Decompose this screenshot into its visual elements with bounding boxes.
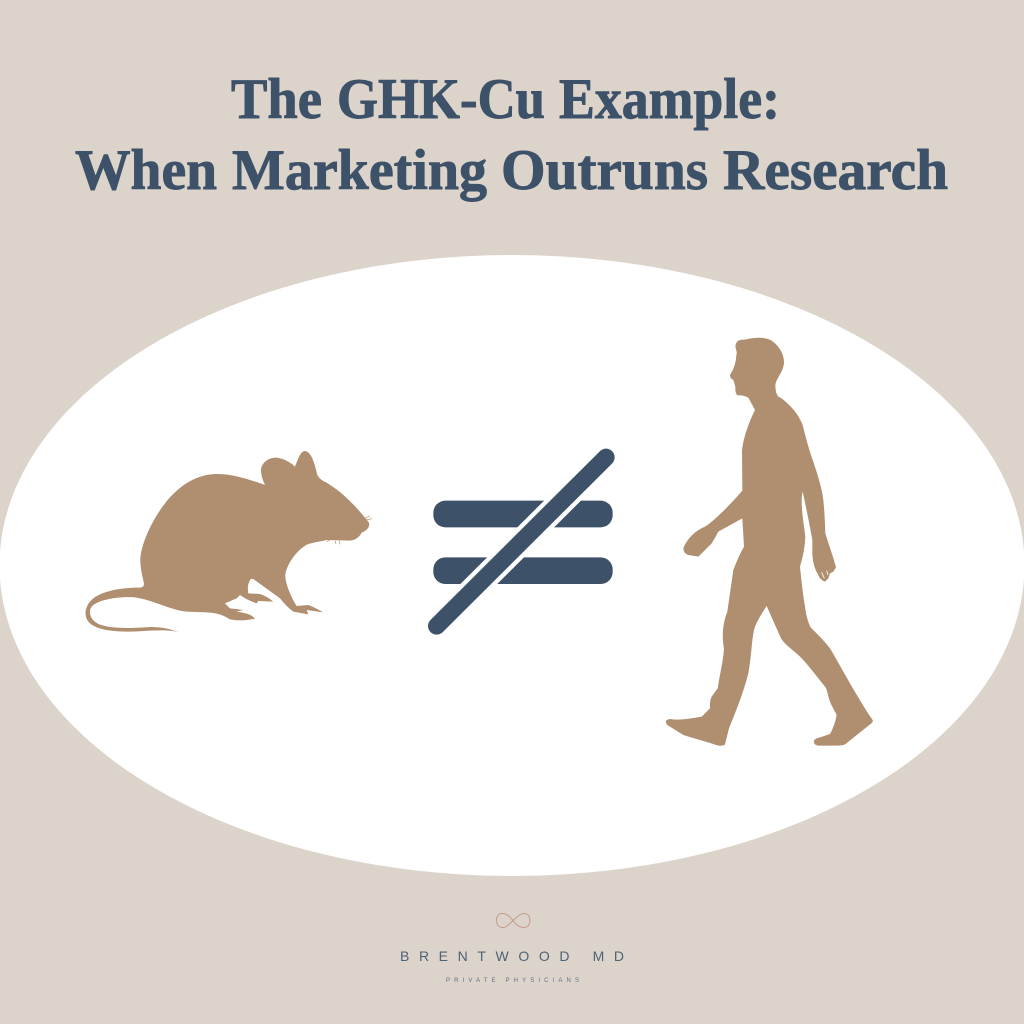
icon: walking man silhouette (666, 338, 873, 746)
panel: white ellipse (0, 255, 1024, 876)
title: The (231, 68, 322, 131)
title: When (75, 139, 217, 202)
logo: Brentwood MD (400, 914, 624, 984)
title: Example: (559, 68, 780, 131)
title: Outruns (501, 139, 708, 202)
brand name: BRENTWOOD MD (400, 948, 624, 964)
title: GHK-Cu (337, 68, 545, 131)
icon: infinity mark (496, 914, 530, 928)
tagline: PRIVATE PHYSICIANS (446, 978, 579, 984)
title: Marketing (232, 139, 487, 202)
icon: mouse silhouette (86, 451, 372, 632)
title: Research (723, 139, 948, 202)
icon: not-equal sign (433, 457, 613, 626)
title (75, 68, 948, 202)
